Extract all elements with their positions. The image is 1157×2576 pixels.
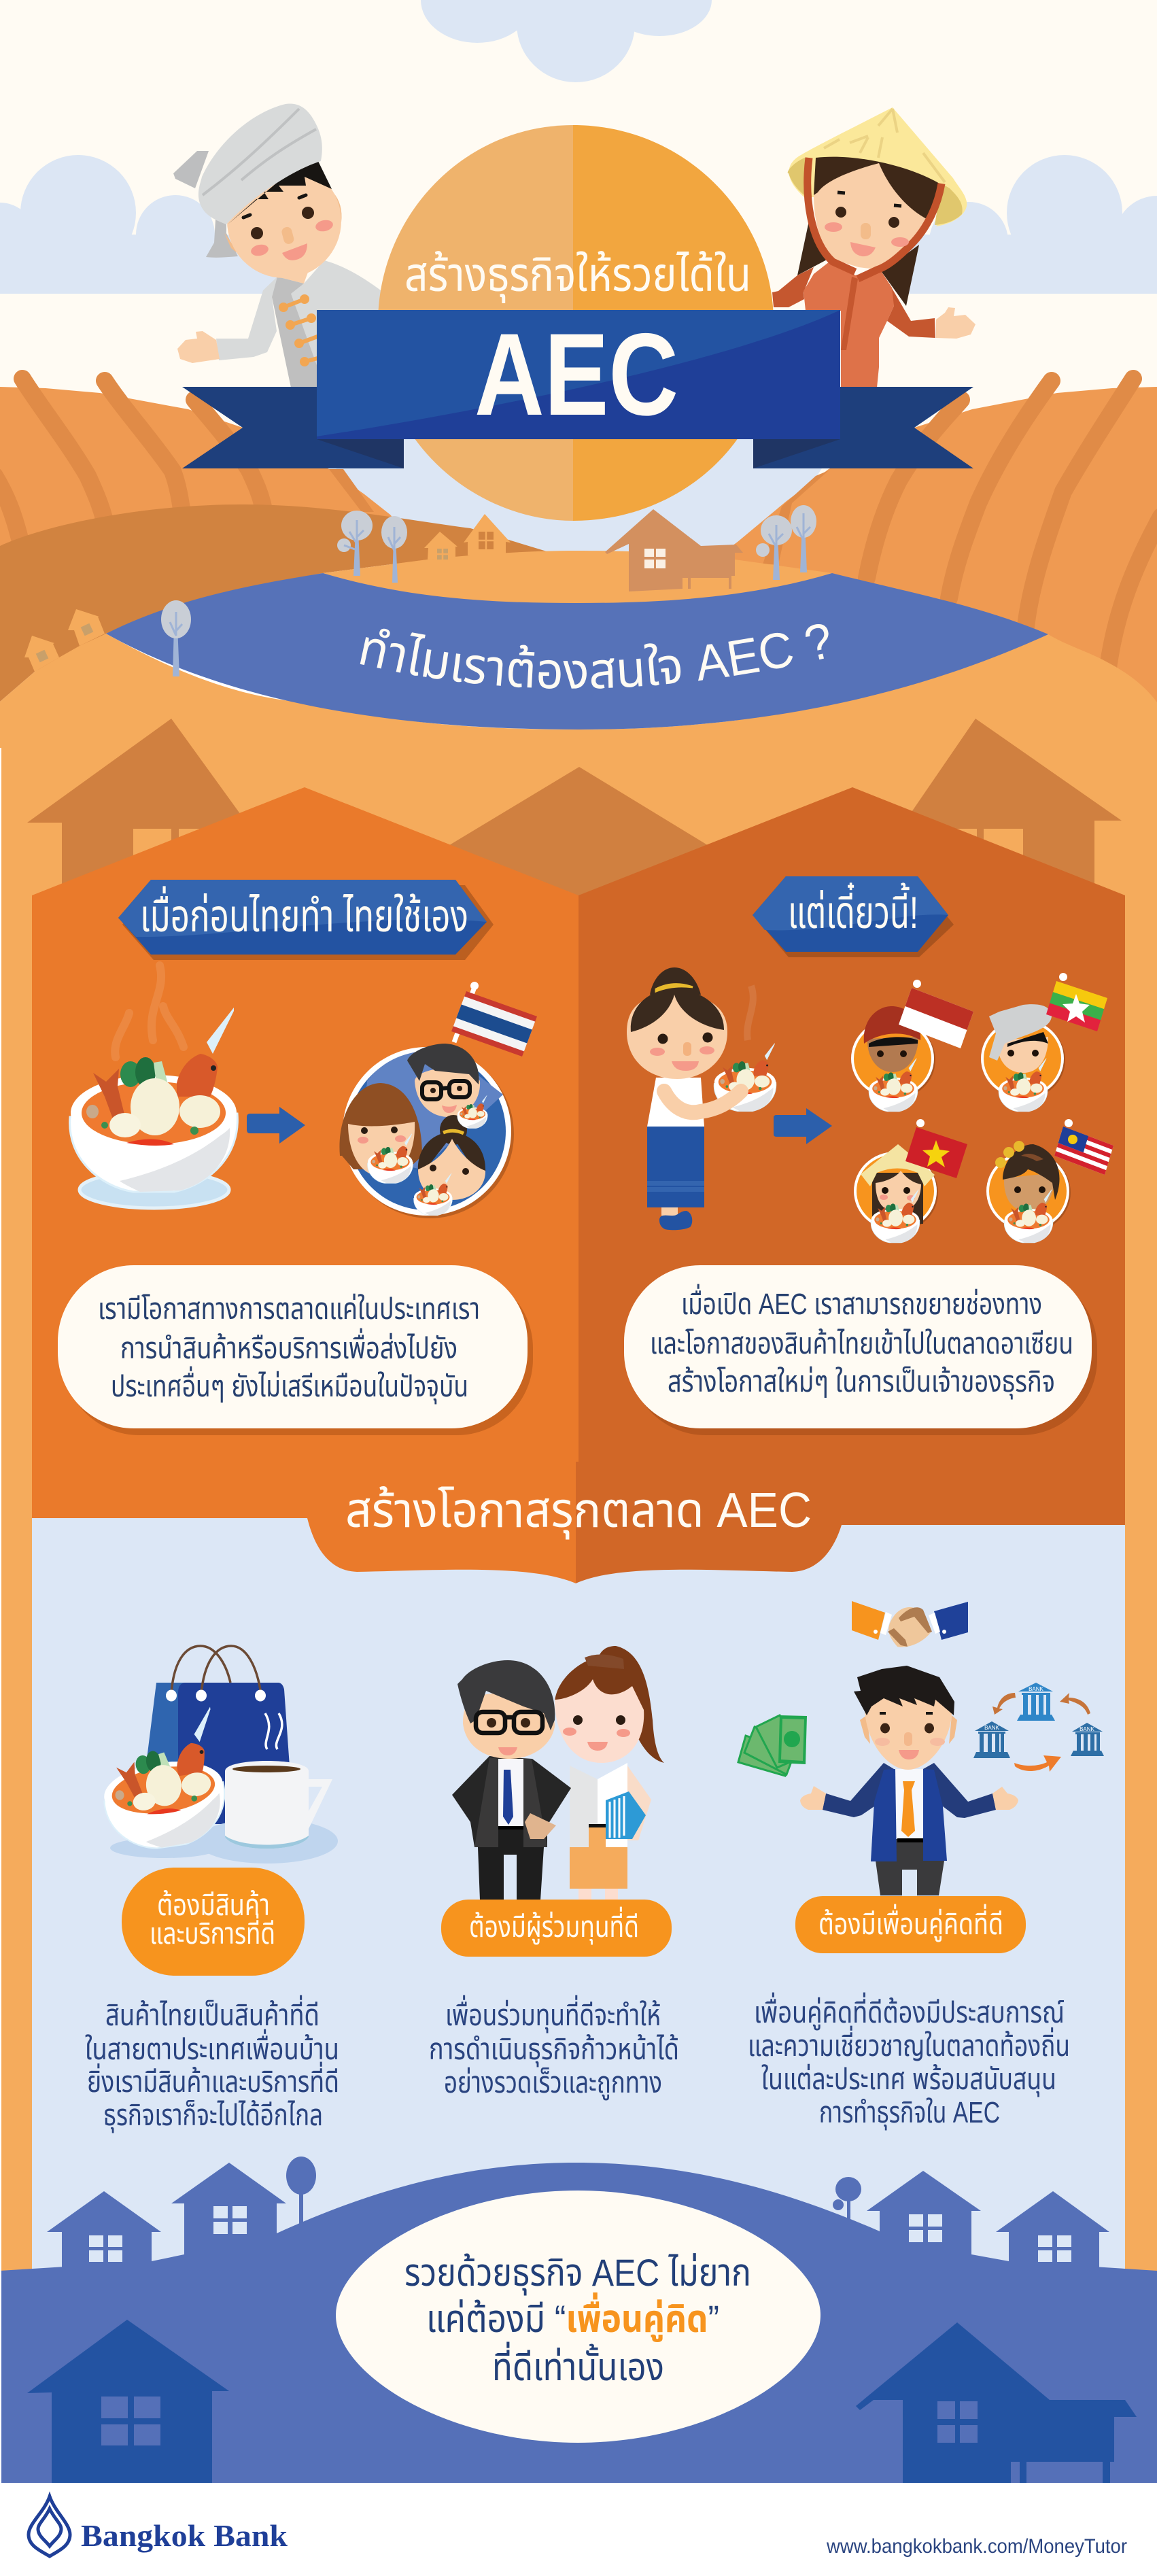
background houses: [27, 719, 1122, 952]
header badge right: [753, 876, 954, 957]
hand: [177, 331, 220, 363]
arms: [772, 267, 814, 307]
icon: money: [738, 1715, 807, 1776]
small windows: [89, 2206, 247, 2262]
title ribbon: [182, 309, 973, 468]
top bank: BANK: [1029, 1686, 1044, 1692]
curved ribbon: [106, 573, 1048, 729]
head: [860, 1715, 957, 1744]
text column 1: ยิ่งเรามีสินค้าและบริการที่ดี: [87, 2061, 339, 2099]
long hair: [797, 221, 829, 275]
pill 3: [795, 1896, 1026, 1953]
flag: Vietnam: [905, 1119, 967, 1178]
ribbon folds: [317, 439, 404, 468]
head: [333, 192, 341, 224]
hand: [936, 307, 975, 339]
arrow left: [247, 1107, 305, 1144]
side clouds: [0, 155, 1157, 294]
text column 2: อย่างรวดเร็วและถูกทาง: [444, 2066, 662, 2101]
big house left: [27, 2320, 229, 2483]
panel left: [32, 787, 578, 1518]
icon: banks and arrows: [973, 1683, 1104, 1772]
logo leaf: [29, 2496, 70, 2556]
head: [627, 995, 727, 1079]
hill houses left: [24, 609, 105, 672]
right hill: [680, 379, 1157, 748]
panel: market section: [32, 1462, 1125, 2274]
skirt: [647, 1127, 704, 1207]
sun: [378, 125, 774, 521]
pill 1: และบริการที่ดี: [150, 1913, 275, 1951]
arm: [664, 1091, 741, 1112]
text column 2: [429, 1995, 679, 2101]
circle of Thai people: [339, 1044, 514, 1218]
ribbon main: [317, 310, 840, 439]
heading banner: [307, 1462, 842, 1583]
woman with soup: [627, 967, 776, 1230]
man: [478, 1847, 544, 1900]
icon: shopping bags: [93, 1646, 338, 1864]
jacket: [871, 1769, 897, 1861]
speech blob left: การนำสินค้าหรือบริการเพื่อส่งไปยัง: [120, 1328, 457, 1365]
icon: handshake: [852, 1601, 968, 1647]
face details: [302, 207, 314, 219]
text column 3: และความเชี่ยวชาญในตลาดท้องถิ่น: [748, 2025, 1070, 2063]
book: [606, 1791, 646, 1839]
flag: Indonesia: [899, 980, 973, 1048]
speech blob left: [58, 1265, 533, 1435]
bowl: [714, 1043, 776, 1111]
icon: soup bowl: [70, 1008, 237, 1192]
background house windows: [133, 829, 1023, 870]
text column 1: [85, 1995, 339, 2133]
panel right: [578, 787, 1125, 1525]
right bank: [1071, 1723, 1104, 1756]
flag: Myanmar: [1046, 973, 1107, 1031]
arms: [823, 1763, 894, 1817]
portrait: Malaysia: [986, 1141, 1071, 1243]
top: [647, 1078, 704, 1127]
shirt and tie: [895, 1769, 923, 1839]
straps: [808, 158, 942, 279]
small houses in valley: [424, 514, 511, 560]
right bank: BANK: [1080, 1726, 1095, 1732]
house: valley stilt house: [605, 509, 743, 591]
pill 2: ต้องมีผู้ร่วมทุนที่ดี: [469, 1906, 639, 1945]
text column 3: ในแต่ละประเทศ พร้อมสนับสนุน: [761, 2063, 1056, 2097]
ground behind ribbon: [323, 551, 832, 612]
partners: man and woman: [452, 1646, 664, 1900]
arrows: [992, 1693, 1016, 1715]
pill 3: ต้องมีเพื่อนคู่คิดที่ดี: [818, 1904, 1003, 1942]
speech blob right: [624, 1265, 1097, 1435]
pants: [876, 1861, 944, 1895]
small windows right: [909, 2214, 1071, 2262]
left edge strip: [0, 748, 1, 2483]
pill 1: ต้องมีสินค้า: [157, 1889, 270, 1922]
portrait: Myanmar: [981, 1004, 1065, 1112]
conclusion bubble: รวยด้วยธุรกิจ AEC ไม่ยาก: [404, 2251, 751, 2295]
left bank: [973, 1721, 1010, 1758]
speech blob right: เมื่อเปิด AEC เราสามารถขยายช่องทาง: [681, 1284, 1042, 1321]
sky: [0, 0, 1157, 544]
AEC: AEC: [474, 309, 678, 440]
conclusion bubble: ที่ดีเท่านั้นเอง: [492, 2341, 664, 2388]
steam: [747, 986, 753, 1040]
arrow right: [774, 1108, 832, 1144]
flag: Malaysia: [1054, 1119, 1113, 1175]
bowl: [93, 1706, 231, 1855]
text column 2: การดำเนินธุรกิจก้าวหน้าได้: [429, 2033, 679, 2067]
woman brown hair: [339, 1083, 422, 1169]
tree left: [161, 600, 191, 676]
cup: [309, 1779, 332, 1829]
buttons: [281, 296, 317, 364]
woman: [555, 1646, 664, 1763]
footer: [29, 2496, 1127, 2558]
speech blob right: สร้างโอกาสใหม่ๆ ในการเป็นเจ้าของธุรกิจ: [668, 1365, 1055, 1400]
text column 3: การทำธุรกิจใน AEC: [819, 2096, 1000, 2131]
man in turban: [173, 103, 381, 388]
header badge left: เมื่อก่อนไทยทำ ไทยใช้เอง: [140, 886, 468, 941]
sky valley: [320, 435, 843, 585]
hat: [789, 107, 967, 226]
text column 1: ในสายตาประเทศเพื่อนบ้าน: [85, 2029, 339, 2066]
ground and bridge: [0, 2163, 1157, 2483]
bank name: Bangkok Bank: [81, 2518, 288, 2553]
advisor man: [800, 1666, 1018, 1895]
speech blob left: ประเทศอื่นๆ ยังไม่เสรีเหมือนในปัจจุบัน: [111, 1366, 468, 1405]
portrait: Indonesia: [851, 1006, 935, 1112]
pill 2: [441, 1900, 672, 1957]
man with glasses: [415, 1068, 480, 1117]
text column 2: เพื่อนร่วมทุนที่ดีจะทำให้: [445, 1995, 661, 2033]
left bank: BANK: [984, 1725, 1000, 1731]
header badge right: แต่เดี๋ยวนี้!: [788, 882, 918, 938]
heading banner: สร้างโอกาสรุกตลาด AEC: [345, 1483, 812, 1540]
small bowls: [457, 1095, 487, 1129]
text column 1: สินค้าไทยเป็นสินค้าที่ดี: [105, 1995, 320, 2032]
hands: [800, 1786, 826, 1810]
left hill: [0, 379, 435, 564]
ribbon tails: [182, 387, 404, 468]
turban: [173, 151, 209, 188]
brown hill: [0, 504, 553, 702]
heading: build wealth: สร้างธุรกิจให้รวยได้ใน: [404, 248, 751, 303]
face details: [835, 207, 846, 218]
village: [0, 2157, 1157, 2483]
text column 3: เพื่อนคู่คิดที่ดีต้องมีประสบการณ์: [754, 1992, 1065, 2031]
pill 1: [122, 1868, 305, 1976]
small houses right: [833, 2171, 1109, 2274]
dress: [804, 262, 894, 388]
coat: [272, 260, 381, 388]
top cloud: [421, 0, 712, 82]
face: [814, 163, 928, 270]
top bank: [1017, 1683, 1055, 1721]
icon: steam: [115, 965, 184, 1057]
saucers: [110, 1838, 219, 1858]
big stilt house right: [856, 2322, 1137, 2483]
website: www.bangkokbank.com/MoneyTutor: [826, 2535, 1127, 2558]
header badge left: [118, 880, 494, 960]
Thai flag: [451, 982, 537, 1057]
icon: plate: [80, 1171, 229, 1208]
woman in conical hat: [772, 107, 975, 388]
hair cap: [814, 157, 939, 231]
conclusion bubble: [336, 2191, 821, 2443]
speech blob left: เรามีโอกาสทางการตลาดแค่ในประเทศเรา: [98, 1292, 480, 1326]
conclusion bubble: แค่ต้องมี “เพื่อนคู่คิด”: [426, 2292, 719, 2342]
portrait: Vietnam: [854, 1144, 938, 1243]
text column 3: [748, 1992, 1070, 2131]
bun: [650, 967, 701, 995]
curved heading: ทำไมเราต้องสนใจ AEC ?: [360, 624, 829, 689]
ground: [0, 634, 1157, 2312]
woman dark hair: [440, 1115, 467, 1145]
text column 1: ธุรกิจเราก็จะไปได้อีกไกล: [103, 2099, 323, 2133]
trees in valley: [337, 505, 816, 583]
turban tail: [206, 220, 238, 258]
small houses left: [47, 2157, 316, 2274]
